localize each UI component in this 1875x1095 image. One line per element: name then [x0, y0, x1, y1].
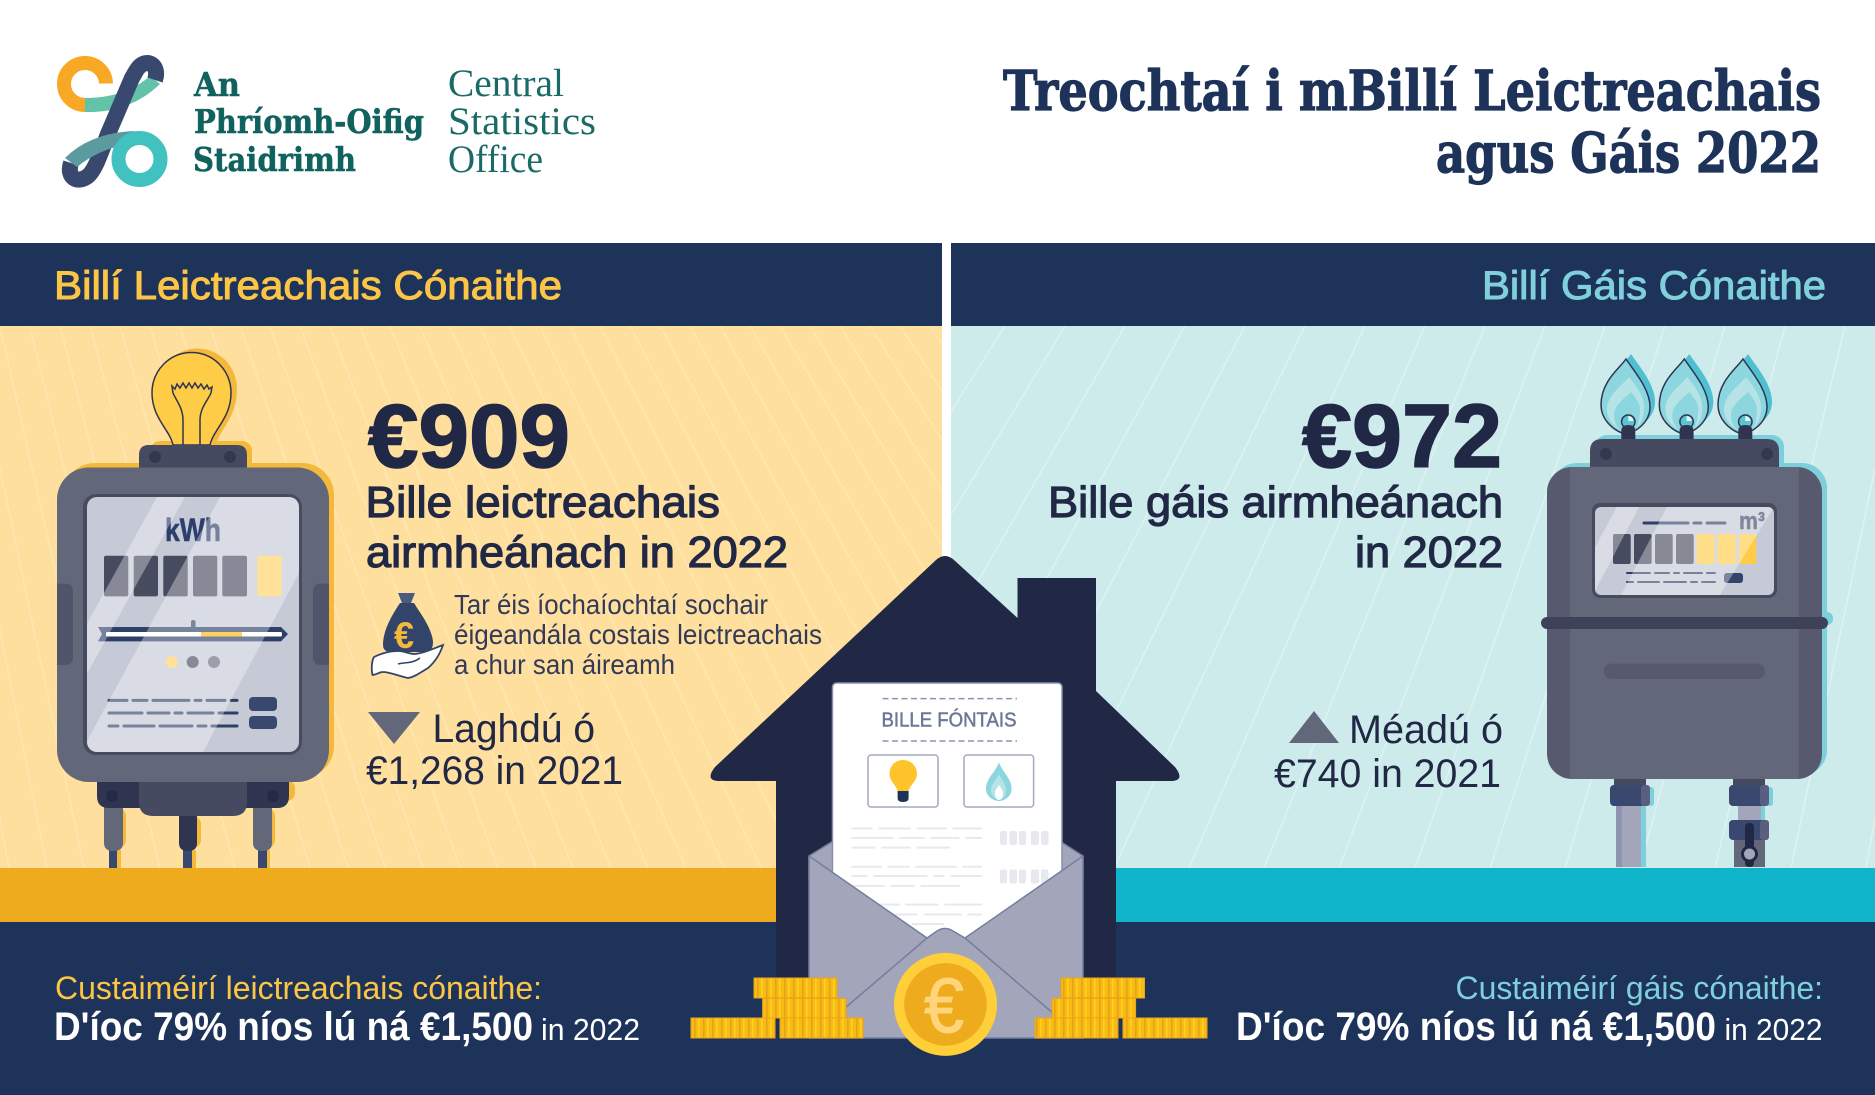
icon: gas box [964, 755, 1034, 807]
envelope front [809, 856, 1083, 1038]
panel: electricity background [0, 326, 942, 868]
logo text: Irish name: Phríomh-Oifig [194, 102, 424, 141]
stat caption: airmheánach in 2022 [366, 528, 788, 577]
note: after emergency payments [454, 589, 822, 680]
icon: electricity box [868, 755, 938, 807]
logo symbol [64, 63, 160, 180]
icon: up triangle [1289, 711, 1339, 743]
euro coin [894, 953, 997, 1056]
customer stat: electricity: D'íoc 79% níos lú ná €1,500 [54, 1005, 533, 1049]
bill line items [852, 828, 982, 924]
bill heading [882, 699, 1017, 741]
customer stat: gas: in 2022 [1724, 1012, 1822, 1047]
change text [1274, 708, 1503, 796]
logo text: Irish name: An [193, 65, 240, 104]
note: after emergency payments: a chur san áireamh [454, 649, 675, 680]
big number: €972 [1302, 387, 1502, 487]
meter cap [1590, 439, 1779, 468]
icon: gas meter with flames [1541, 354, 1833, 867]
meter lower housing [97, 775, 289, 816]
change text: €1,268 in 2021 [366, 749, 623, 793]
logo text: English name: Office [448, 138, 543, 181]
title [1003, 58, 1821, 185]
note: after emergency payments: Tar éis íochaíochtaí sochair [454, 589, 768, 620]
change text: Laghdú ó [432, 707, 595, 751]
meter teal shadow [1552, 435, 1833, 867]
meter side tabs [57, 584, 329, 665]
stat: average gas bill [1048, 387, 1503, 577]
meter body [57, 468, 329, 782]
euro coin: € [924, 961, 964, 1049]
glass highlight [87, 497, 299, 752]
ground strip: electricity [0, 868, 942, 922]
logo text: Irish name [193, 65, 424, 179]
meter strap [1541, 617, 1828, 629]
stat caption [1048, 478, 1503, 577]
coin stacks [691, 978, 1207, 1038]
customer stat: gas [1236, 970, 1823, 1049]
heading band: electricity: Billí Leictreachais Cónaithe [54, 264, 562, 308]
usage bar [98, 620, 288, 641]
logo text: Irish name: Staidrimh [193, 140, 356, 179]
house silhouette [711, 556, 1179, 1020]
meter orange shadow [63, 348, 334, 868]
logo: Central Statistics Office [64, 62, 596, 181]
change text: €740 in 2021 [1274, 752, 1501, 796]
flames [1601, 354, 1772, 439]
heading band: gas: Billí Gáis Cónaithe [1482, 264, 1826, 308]
change: decrease from 2021 [366, 707, 623, 793]
reading digits [104, 556, 282, 596]
heading band: gas [951, 243, 1875, 326]
big number: €909 [368, 387, 570, 487]
stat: average electricity bill [366, 387, 788, 577]
bill amount blocks [1000, 831, 1048, 884]
small button [1724, 573, 1743, 583]
note: after emergency payments: éigeandála costais leictreachais [454, 619, 822, 650]
small print lines [1627, 523, 1725, 582]
meter slot [1604, 664, 1765, 679]
label: kWh: kWh [165, 512, 221, 548]
usage bar fill [106, 632, 282, 636]
meter cap [139, 445, 247, 468]
light bulb [152, 352, 231, 445]
stat caption: Bille gáis airmheánach [1048, 478, 1503, 527]
indicator dots [166, 656, 220, 668]
customer stat: electricity: in 2022 [541, 1012, 640, 1047]
small buttons [249, 697, 277, 729]
meter display screen [1592, 503, 1777, 598]
icon: money bag in hand: € [394, 615, 414, 656]
meter body [1547, 467, 1822, 779]
ground strip: gas [951, 868, 1875, 922]
reading digits [1613, 534, 1756, 564]
bill heading: BILLE FÓNTAIS [882, 708, 1016, 732]
small print lines [109, 700, 237, 726]
customer stat: gas: D'íoc 79% níos lú ná €1,500 [1236, 1005, 1716, 1049]
bottom navy band [0, 922, 1875, 1095]
icon: down triangle [368, 712, 420, 744]
customer stat: gas: Custaiméirí gáis cónaithe: [1456, 970, 1823, 1006]
change: increase from 2021 [1274, 708, 1503, 796]
stat caption: Bille leictreachais [366, 478, 720, 527]
glass highlight [1595, 507, 1774, 595]
logo text: English name: Central [448, 62, 564, 105]
logo text: English name [448, 62, 596, 181]
customer stat: electricity [54, 970, 640, 1049]
change text: Méadú ó [1349, 708, 1503, 752]
change text [366, 707, 623, 793]
stat caption: in 2022 [1355, 528, 1503, 577]
stat caption [366, 478, 788, 577]
logo text: English name: Statistics [448, 100, 596, 143]
heading band: electricity [0, 243, 942, 326]
illustration: house with bill, envelope and coins [691, 556, 1207, 1056]
gas pipes [1610, 775, 1769, 867]
label: m3: m³ [1739, 508, 1765, 535]
meter display screen [83, 494, 302, 755]
meter legs [104, 800, 272, 868]
customer stat: electricity: Custaiméirí leictreachais cónaithe: [55, 970, 542, 1006]
bill paper [832, 683, 1062, 973]
envelope back [809, 840, 1083, 880]
icon: electricity meter with bulb [57, 348, 334, 868]
panel: gas background [951, 326, 1875, 868]
icon: money bag in hand [372, 593, 443, 678]
